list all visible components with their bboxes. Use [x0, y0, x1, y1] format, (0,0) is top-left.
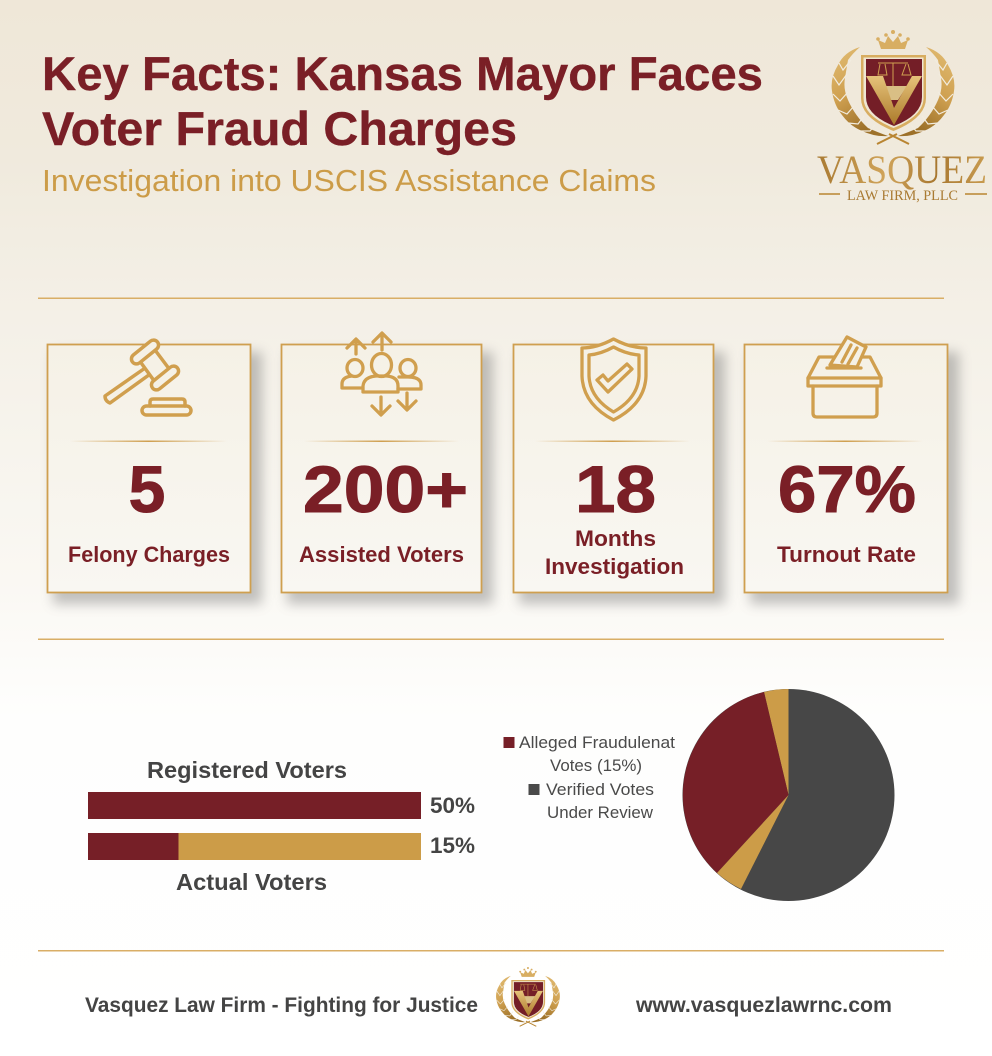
legend: Verified Votes	[546, 780, 654, 799]
legend: Alleged Fraudulenat	[519, 733, 675, 752]
legend: Votes (15%)	[550, 756, 642, 775]
stat: 5: 5	[129, 452, 165, 526]
label: months investigation: Investigation	[545, 554, 684, 579]
title: Voter Fraud Charges	[42, 102, 517, 155]
label: months investigation	[545, 526, 684, 579]
pie chart	[682, 689, 894, 901]
label: turnout rate: Turnout Rate	[777, 542, 916, 567]
label: assisted voters: Assisted Voters	[299, 542, 464, 567]
logo tagline: LAW FIRM, PLLC	[847, 188, 958, 204]
card: assisted voters	[282, 333, 493, 604]
bar: registered voters	[88, 792, 421, 819]
title	[42, 47, 763, 155]
subtitle: Investigation into USCIS Assistance Claims	[42, 163, 656, 198]
legend: Under Review	[547, 803, 654, 822]
stat: 67%: 67%	[778, 452, 916, 526]
stat: 18: 18	[575, 452, 656, 526]
value: 15%: 15%	[430, 833, 475, 858]
card: turnout rate	[744, 337, 959, 604]
label: months investigation: Months	[575, 526, 656, 551]
footer logo	[496, 967, 560, 1026]
footer url: www.vasquezlawrnc.com	[635, 994, 892, 1017]
footer text: Vasquez Law Firm - Fighting for Justice	[85, 994, 478, 1017]
card: months investigation	[514, 339, 725, 604]
label: actual voters: Actual Voters	[176, 869, 327, 895]
label: felony charges: Felony Charges	[68, 542, 230, 567]
legend	[504, 733, 675, 822]
label: registered voters: Registered Voters	[147, 757, 347, 783]
stat: 200+: 200+	[303, 452, 468, 526]
bar: actual voters	[88, 833, 421, 860]
icon: gavel	[105, 338, 191, 415]
card: felony charges	[48, 338, 262, 604]
value: 50%: 50%	[430, 793, 475, 818]
icon: ballot box	[808, 337, 881, 417]
logo	[817, 30, 987, 204]
bar chart	[88, 757, 475, 895]
icon: shield with check	[582, 339, 646, 420]
icon: people with arrows	[342, 333, 421, 415]
title: Key Facts: Kansas Mayor Faces	[42, 47, 763, 100]
